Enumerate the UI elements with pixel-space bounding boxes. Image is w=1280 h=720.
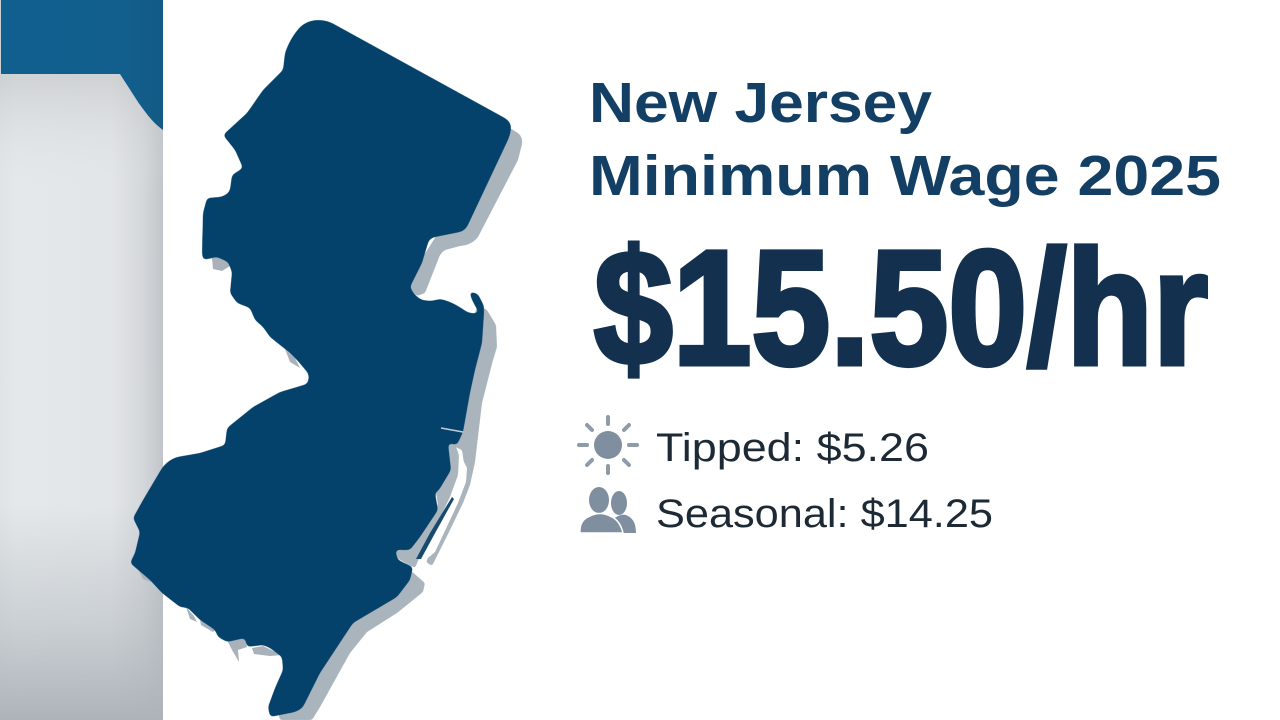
map shadow: small patches: [138, 257, 300, 662]
row: seasonal wage: [580, 487, 993, 536]
label: tipped: Tipped: $5.26: [656, 426, 929, 470]
map: New Jersey silhouette with shadow: [130, 20, 522, 720]
map state shape: [130, 20, 511, 717]
title: [589, 71, 1221, 208]
map shadow: east coast: [426, 305, 497, 566]
row: tipped wage: [579, 417, 929, 473]
title: New Jersey: [589, 71, 932, 135]
map shadow: northeast edge: [405, 125, 522, 296]
map shadow: light inlet line: [441, 428, 463, 432]
map shadow: south coast: [275, 570, 425, 720]
icon: sun: [579, 417, 637, 473]
label: seasonal: Seasonal: $14.25: [656, 492, 993, 536]
map shadow: lagoon channel: [416, 497, 454, 559]
title: Minimum Wage 2025: [589, 144, 1221, 208]
map shadow: barrier island gap: [416, 458, 467, 564]
headline wage figure: $15.50/hr: [594, 216, 1208, 399]
icon: people: [580, 487, 636, 533]
panel: left decorative sidebar: [0, 0, 163, 720]
map shadow: inner lagoon: [392, 443, 459, 568]
